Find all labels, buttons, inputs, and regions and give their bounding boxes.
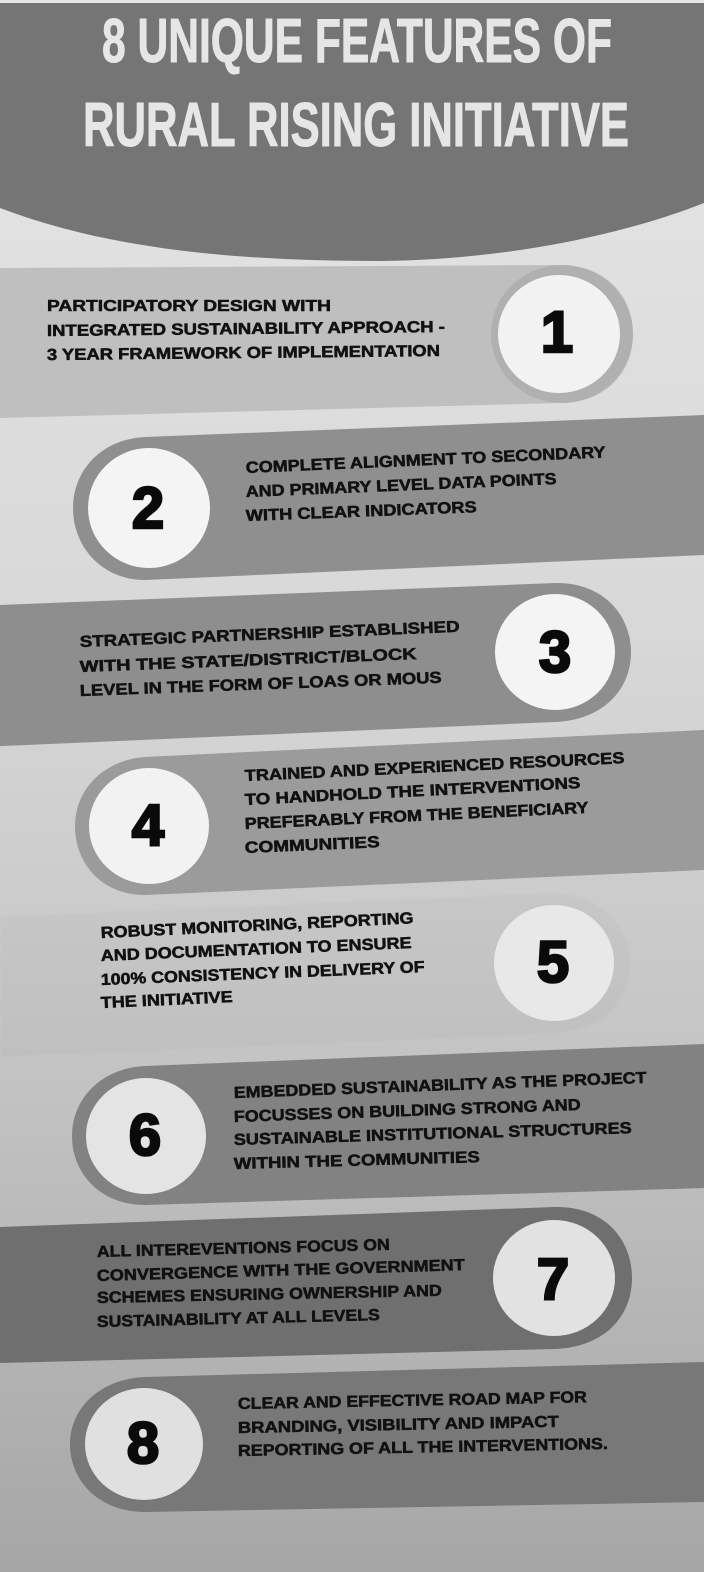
feature 3 number badge: 3: [539, 620, 571, 685]
feature 6 number badge: [86, 1078, 206, 1194]
panel: feature 3: [0, 583, 631, 746]
feature 1 text: PARTICIPATORY DESIGN WITH: [47, 298, 331, 315]
feature 6 text: EMBEDDED SUSTAINABILITY AS THE PROJECT: [234, 1070, 647, 1102]
feature 4 number badge: [89, 768, 209, 884]
feature 3 text: [79, 619, 460, 700]
panel: feature 2: [73, 415, 704, 580]
feature 5 number badge: [494, 905, 614, 1021]
title: [83, 7, 629, 160]
feature 3 text: WITH THE STATE/DISTRICT/BLOCK: [80, 646, 417, 676]
feature 8 text: REPORTING OF ALL THE INTERVENTIONS.: [238, 1436, 608, 1460]
feature 1 text: 3 YEAR FRAMEWORK OF IMPLEMENTATION: [47, 343, 440, 364]
feature 7 text: SCHEMES ENSURING OWNERSHIP AND: [97, 1283, 442, 1307]
feature 8 text: BRANDING, VISIBILITY AND IMPACT: [238, 1414, 559, 1437]
feature 5 text: 100% CONSISTENCY IN DELIVERY OF: [100, 959, 425, 989]
header band: [0, 3, 704, 261]
feature 2 text: [245, 444, 606, 525]
feature 7 text: CONVERGENCE WITH THE GOVERNMENT: [97, 1257, 465, 1285]
feature 4 text: COMMUNITIES: [244, 834, 380, 857]
feature 5 text: ROBUST MONITORING, REPORTING: [100, 910, 414, 942]
feature 3 text: STRATEGIC PARTNERSHIP ESTABLISHED: [79, 619, 460, 651]
panel: feature 7: [0, 1207, 632, 1363]
panel: feature 5: [0, 893, 630, 1057]
feature 4 number badge: 4: [132, 793, 164, 858]
feature 6 text: SUSTAINABLE INSTITUTIONAL STRUCTURES: [234, 1120, 632, 1149]
feature 8 text: [238, 1389, 608, 1460]
feature 2 number badge: 2: [132, 476, 164, 541]
feature 4 text: PREFERABLY FROM THE BENEFICIARY: [244, 800, 589, 833]
feature 8 text: CLEAR AND EFFECTIVE ROAD MAP FOR: [238, 1389, 588, 1413]
feature 2 text: WITH CLEAR INDICATORS: [246, 499, 477, 525]
feature 6 text: FOCUSSES ON BUILDING STRONG AND: [234, 1097, 581, 1126]
feature 7 text: SUSTAINABILITY AT ALL LEVELS: [97, 1307, 380, 1331]
feature 7 number badge: [493, 1220, 615, 1336]
feature 3 number badge: [495, 594, 615, 710]
feature 1 text: INTEGRATED SUSTAINABILITY APPROACH -: [47, 319, 445, 340]
feature 2 number badge: [88, 448, 210, 568]
feature 5 text: [100, 910, 425, 1012]
feature 7 number badge: 7: [537, 1247, 569, 1312]
feature 5 text: AND DOCUMENTATION TO ENSURE: [100, 935, 412, 965]
feature 7 text: [97, 1237, 465, 1331]
feature 5 number badge: 5: [537, 930, 569, 995]
feature 6 number badge: 6: [129, 1103, 161, 1168]
feature 1 text: [47, 298, 445, 364]
panel: feature 8: [70, 1362, 704, 1512]
feature 1 number badge: 1: [541, 300, 573, 365]
feature 2 text: AND PRIMARY LEVEL DATA POINTS: [245, 471, 557, 501]
panel: feature 1: [0, 265, 633, 418]
feature 6 text: [234, 1070, 647, 1173]
feature 8 number badge: 8: [127, 1411, 159, 1476]
panel: feature 4: [75, 730, 704, 895]
feature 6 text: WITHIN THE COMMUNITIES: [234, 1149, 480, 1173]
feature 3 text: LEVEL IN THE FORM OF LOAS OR MOUS: [80, 670, 442, 700]
feature 5 text: THE INITIATIVE: [100, 989, 233, 1012]
feature 7 text: ALL INTEREVENTIONS FOCUS ON: [97, 1237, 390, 1261]
feature 4 text: TO HANDHOLD THE INTERVENTIONS: [244, 775, 581, 809]
feature 8 number badge: [85, 1388, 203, 1500]
feature 2 text: COMPLETE ALIGNMENT TO SECONDARY: [245, 444, 606, 477]
feature 1 number badge: [491, 265, 633, 403]
feature 4 text: [244, 750, 625, 857]
panel: feature 6: [72, 1044, 704, 1205]
feature 4 text: TRAINED AND EXPERIENCED RESOURCES: [244, 750, 625, 785]
